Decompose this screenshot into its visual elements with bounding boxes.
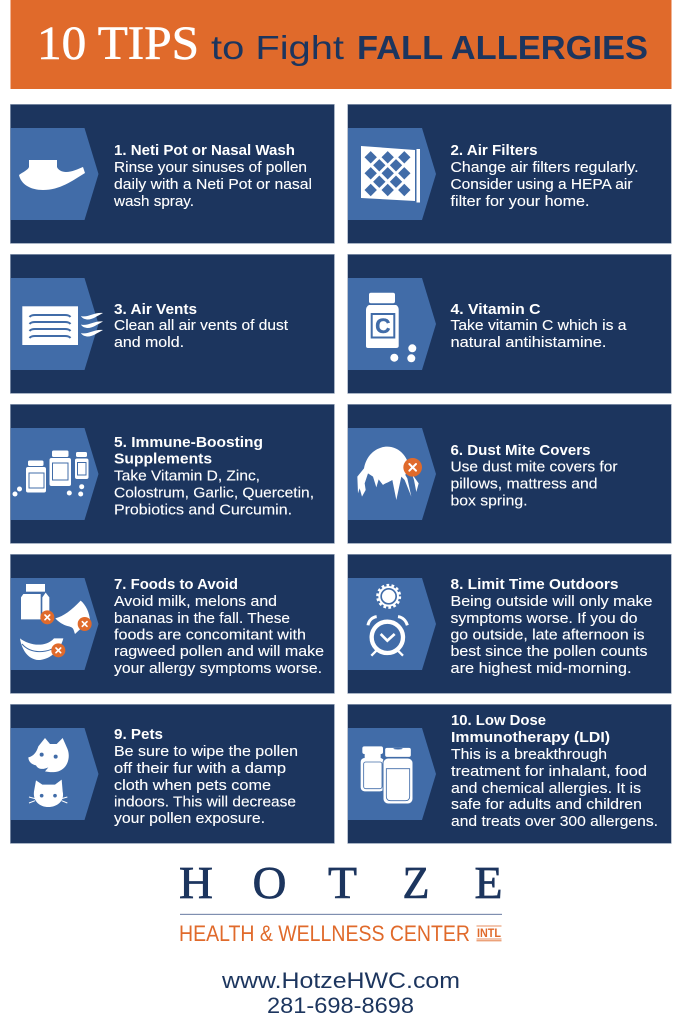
panel: tip 9 pets — [10, 704, 334, 843]
text: tip 5: Supplements — [114, 450, 212, 468]
panel: tip 8 limit time outdoors — [348, 554, 671, 693]
contact details: www.HotzeHWC.com — [221, 968, 460, 993]
text: tip 7: 7. Foods to Avoid — [114, 576, 238, 593]
text: tip 9: cloth when pets come — [114, 777, 271, 794]
text: tip 9: off their fur with a damp — [114, 760, 286, 777]
text: tip 1 — [113, 142, 312, 210]
logo wordmark — [179, 857, 502, 908]
text: tip 7: bananas in the fall. These — [114, 610, 290, 627]
panel: tip 3 air vents — [10, 254, 334, 393]
panel: tip 10 low dose immunotherapy — [348, 704, 671, 843]
text: tip 5 — [114, 434, 314, 518]
icon: dog and cat — [28, 738, 69, 807]
icon: neti pot — [19, 160, 85, 190]
text: tip 10 — [451, 712, 658, 830]
header banner — [10, 0, 672, 89]
text: tip 8: are highest mid-morning. — [450, 660, 632, 677]
logo: Hotze Health & Wellness Center — [179, 857, 502, 946]
text: tip 10: and treats over 300 allergens. — [451, 813, 658, 830]
text: tip 7 — [114, 576, 324, 677]
logo wordmark: T — [328, 857, 357, 908]
panel: tip 6 dust mite covers — [348, 404, 671, 543]
text: tip 8 — [450, 576, 652, 677]
text: tip 8: symptoms worse. If you do — [450, 610, 638, 627]
text: tip 10: safe for adults and children — [451, 796, 642, 813]
logo wordmark: H — [179, 857, 213, 908]
text: tip 2: 2. Air Filters — [450, 142, 538, 159]
panel: tip 1 neti pot — [10, 104, 334, 243]
text: tip 5: 5. Immune-Boosting — [114, 434, 263, 451]
text: tip 7: ragweed pollen and will make — [114, 643, 324, 660]
title: 10 TIPS — [37, 17, 199, 70]
text: tip 2: filter for your home. — [450, 193, 590, 210]
text: tip 4 — [450, 301, 627, 351]
text: tip 3: and mold. — [114, 334, 184, 351]
panel: tip 7 foods to avoid — [10, 554, 334, 693]
text: tip 6: pillows, mattress and — [450, 476, 598, 492]
text: tip 10: and chemical allergies. It is — [451, 780, 641, 797]
icon: vitamin C bottle: C — [375, 315, 390, 338]
text: tip 3: Clean all air vents of dust — [114, 317, 289, 334]
icon: vitamin C bottle — [366, 293, 416, 362]
text: tip 6: Use dust mite covers for — [450, 458, 618, 476]
text: tip 1: Rinse your sinuses of pollen — [114, 159, 307, 176]
title: FALL ALLERGIES — [357, 29, 648, 66]
text: tip 8: go outside, late afternoon is — [450, 626, 644, 644]
text: tip 5: Probiotics and Curcumin. — [114, 502, 292, 518]
text: tip 1: wash spray. — [113, 193, 194, 210]
logo tagline: HEALTH & WELLNESS CENTER — [179, 921, 470, 946]
text: tip 2: Change air filters regularly. — [450, 159, 638, 176]
text: tip 6 — [450, 442, 618, 510]
logo INTL mark: INTL — [477, 928, 501, 940]
text: tip 3: 3. Air Vents — [114, 301, 197, 318]
text: tip 7: your allergy symptoms worse. — [114, 660, 322, 677]
panel: tip 4 vitamin C — [348, 254, 671, 393]
icon: supplement bottles — [12, 450, 88, 496]
text: tip 5: Colostrum, Garlic, Quercetin, — [114, 484, 314, 502]
icon: dust mite — [357, 447, 422, 500]
logo wordmark: E — [474, 857, 502, 908]
text: tip 4: Take vitamin C which is a — [450, 317, 627, 334]
icon: vials — [361, 746, 413, 804]
text: tip 2: Consider using a HEPA air — [450, 176, 632, 193]
text: tip 6: box spring. — [450, 492, 528, 510]
text: tip 10: 10. Low Dose — [451, 712, 546, 729]
text: tip 9: 9. Pets — [114, 726, 163, 743]
text: tip 6: 6. Dust Mite Covers — [450, 442, 590, 459]
contact details — [221, 968, 460, 1018]
text: tip 10: treatment for inhalant, food — [451, 763, 647, 780]
icon: air vent — [22, 306, 103, 345]
text: tip 8: 8. Limit Time Outdoors — [450, 576, 618, 593]
logo wordmark: Z — [402, 857, 430, 908]
icon: air filter — [361, 146, 420, 202]
text: tip 9: Be sure to wipe the pollen — [114, 743, 298, 760]
text: tip 7: Avoid milk, melons and — [114, 593, 277, 610]
icon: sun and alarm clock — [368, 585, 407, 656]
text: tip 1: daily with a Neti Pot or nasal — [114, 176, 312, 193]
text: tip 10: This is a breakthrough — [451, 746, 607, 763]
text: tip 7: foods are concomitant with — [114, 626, 306, 644]
icon: milk, banana and melon — [20, 584, 92, 660]
logo wordmark: O — [252, 857, 286, 908]
panel: tip 5 supplements — [10, 404, 334, 543]
contact details: 281-698-8698 — [267, 993, 414, 1018]
text: tip 9: indoors. This will decrease — [114, 794, 296, 810]
text: tip 8: best since the pollen counts — [450, 643, 648, 660]
text: tip 8: Being outside will only make — [450, 593, 652, 610]
text: tip 3 — [114, 301, 289, 351]
panel: tip 2 air filters — [348, 104, 671, 243]
text: tip 1: 1. Neti Pot or Nasal Wash — [114, 142, 295, 159]
title: to Fight — [211, 29, 344, 66]
text: tip 5: Take Vitamin D, Zinc, — [114, 468, 260, 484]
text: tip 10: Immunotherapy (LDI) — [451, 729, 610, 746]
text: tip 4: natural antihistamine. — [450, 334, 606, 351]
text: tip 9: your pollen exposure. — [114, 810, 265, 827]
title — [37, 17, 648, 70]
text: tip 4: 4. Vitamin C — [450, 301, 541, 318]
text: tip 2 — [450, 142, 638, 210]
text: tip 9 — [114, 726, 298, 827]
